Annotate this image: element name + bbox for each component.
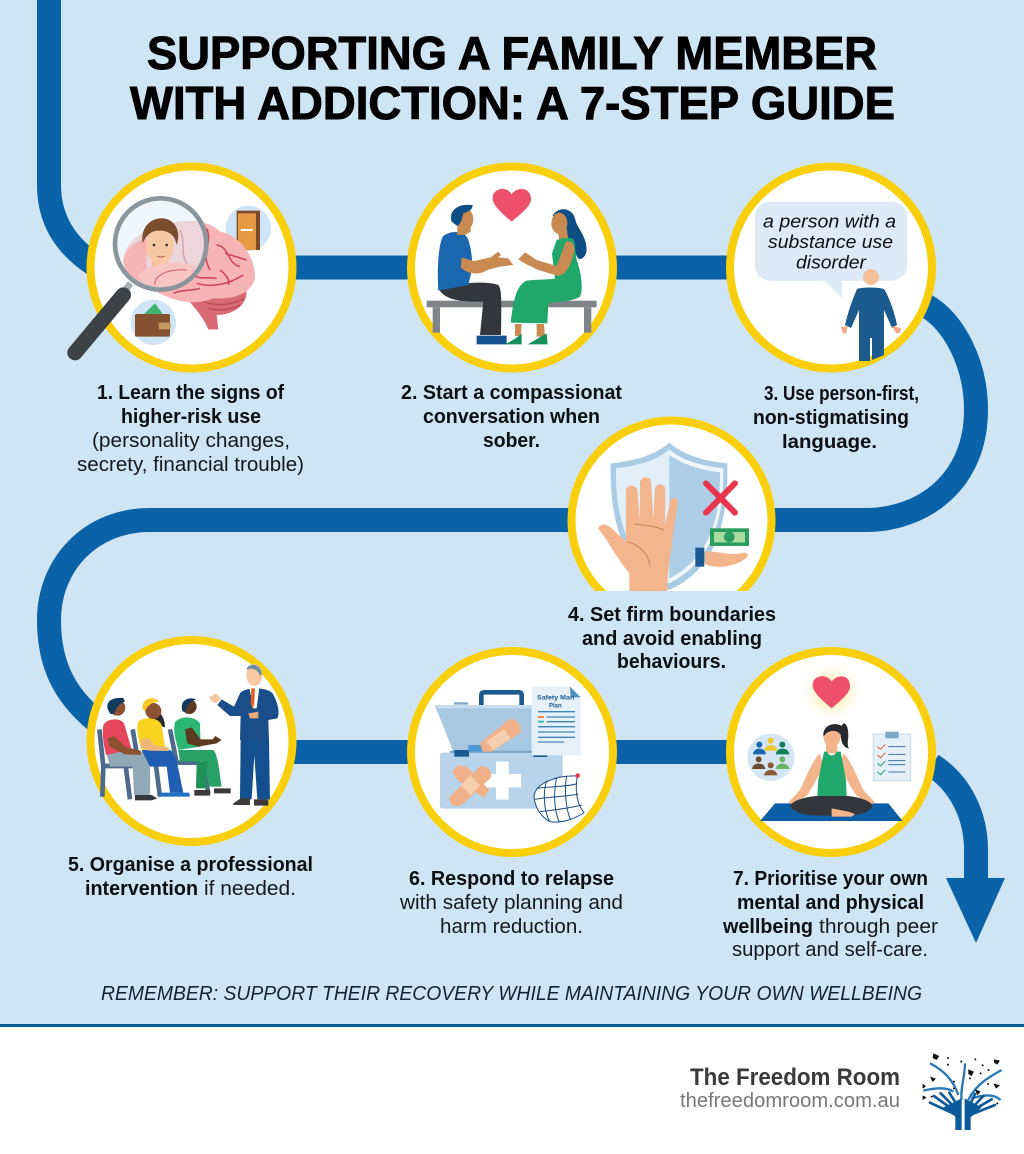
step 4 label: and avoid enabling [582, 628, 762, 650]
step 4 circle [572, 420, 772, 620]
step 1 label [77, 382, 304, 476]
step 2 label [401, 382, 622, 452]
icon: safety plan document [532, 687, 581, 755]
website: thefreedomroom.com.au [680, 1090, 900, 1112]
speech bubble [755, 202, 907, 298]
icon: meditating woman on mat [760, 723, 903, 821]
icon: first-aid kit [435, 692, 563, 809]
step 1 label: (personality changes, [92, 430, 290, 452]
seated person: yellow shirt [137, 698, 190, 797]
icon: brain [123, 221, 255, 329]
icon: safety plan document: Plan [549, 703, 562, 709]
step 5 circle [90, 640, 292, 842]
title: WITH ADDICTION: A 7-STEP GUIDE [130, 77, 895, 129]
step 5 label [68, 854, 313, 900]
icon: wallet [131, 300, 176, 345]
icon: shield [611, 443, 727, 590]
speech bubble: disorder [796, 252, 867, 272]
step 2 circle [411, 166, 613, 368]
winding path [49, 0, 1005, 943]
icon: checklist [873, 732, 911, 781]
step 6 label: with safety planning and [399, 892, 623, 914]
step 7 label: support and self-care. [732, 939, 928, 961]
bench [427, 301, 597, 333]
step 1 circle [75, 166, 293, 368]
step 1 label: higher-risk use [121, 406, 261, 428]
seated person: red shirt [103, 698, 157, 800]
icon: bandages [449, 719, 521, 806]
step 7 circle [730, 651, 932, 853]
step 3 label: language. [782, 432, 877, 453]
step 5 label: 5. Organise a professional [68, 854, 313, 876]
presenter [209, 664, 279, 806]
step 7 label [722, 868, 938, 961]
title [130, 27, 895, 129]
chairs [99, 729, 208, 799]
icon: support group [747, 734, 795, 781]
icon: raised hand [598, 477, 678, 591]
icon: safety plan document: Safety Man [537, 696, 575, 702]
speech bubble: a person with a [763, 210, 896, 232]
woman [505, 209, 587, 344]
step 3 circle [730, 166, 932, 368]
icon: glowing heart [798, 658, 865, 725]
step 4 label [568, 604, 776, 673]
brand name: The Freedom Room [690, 1064, 900, 1091]
step 2 label: conversation when [423, 406, 600, 428]
speech bubble: substance use [768, 231, 893, 252]
icon: magnifying glass [75, 198, 206, 353]
step 7 label: wellbeing [722, 916, 813, 938]
step 2 label: 2. Start a compassionat [401, 382, 622, 404]
step 6 circle [411, 651, 613, 853]
step 4 label: behaviours. [617, 651, 726, 673]
step 3 label [753, 383, 919, 453]
person [841, 269, 901, 361]
step 1 label: 1. Learn the signs of [97, 382, 284, 404]
footer [0, 1024, 1024, 1154]
step 7 label: mental and physical [737, 892, 924, 914]
man [438, 205, 513, 344]
seated person: green shirt [174, 698, 231, 796]
closing reminder: REMEMBER: SUPPORT THEIR RECOVERY WHILE MAINTAINING YOUR OWN WELLBEING [101, 983, 922, 1005]
step 3 label: 3. Use person-first, [764, 383, 919, 405]
step 7 label: 7. Prioritise your own [733, 868, 928, 890]
step 5 label: intervention [85, 878, 198, 900]
icon: open hand [695, 548, 748, 567]
icon: red cross [706, 483, 735, 513]
step 1 label: secrety, financial trouble) [77, 454, 304, 476]
step 6 label: harm reduction. [440, 916, 583, 938]
step 3 label: non-stigmatising [753, 407, 909, 429]
step 6 label: 6. Respond to relapse [409, 868, 614, 890]
step 4 label: 4. Set firm boundaries [568, 604, 776, 626]
icon: door [226, 206, 271, 251]
icon: heart [493, 189, 531, 222]
icon: cash [710, 528, 749, 546]
step 7 label: through peer [819, 916, 938, 938]
step 5 label: if needed. [204, 878, 296, 900]
step 6 label [399, 868, 623, 938]
logo [923, 1053, 1002, 1130]
icon: safety net [534, 776, 584, 822]
step 2 label: sober. [483, 430, 540, 452]
title: SUPPORTING A FAMILY MEMBER [147, 27, 877, 79]
